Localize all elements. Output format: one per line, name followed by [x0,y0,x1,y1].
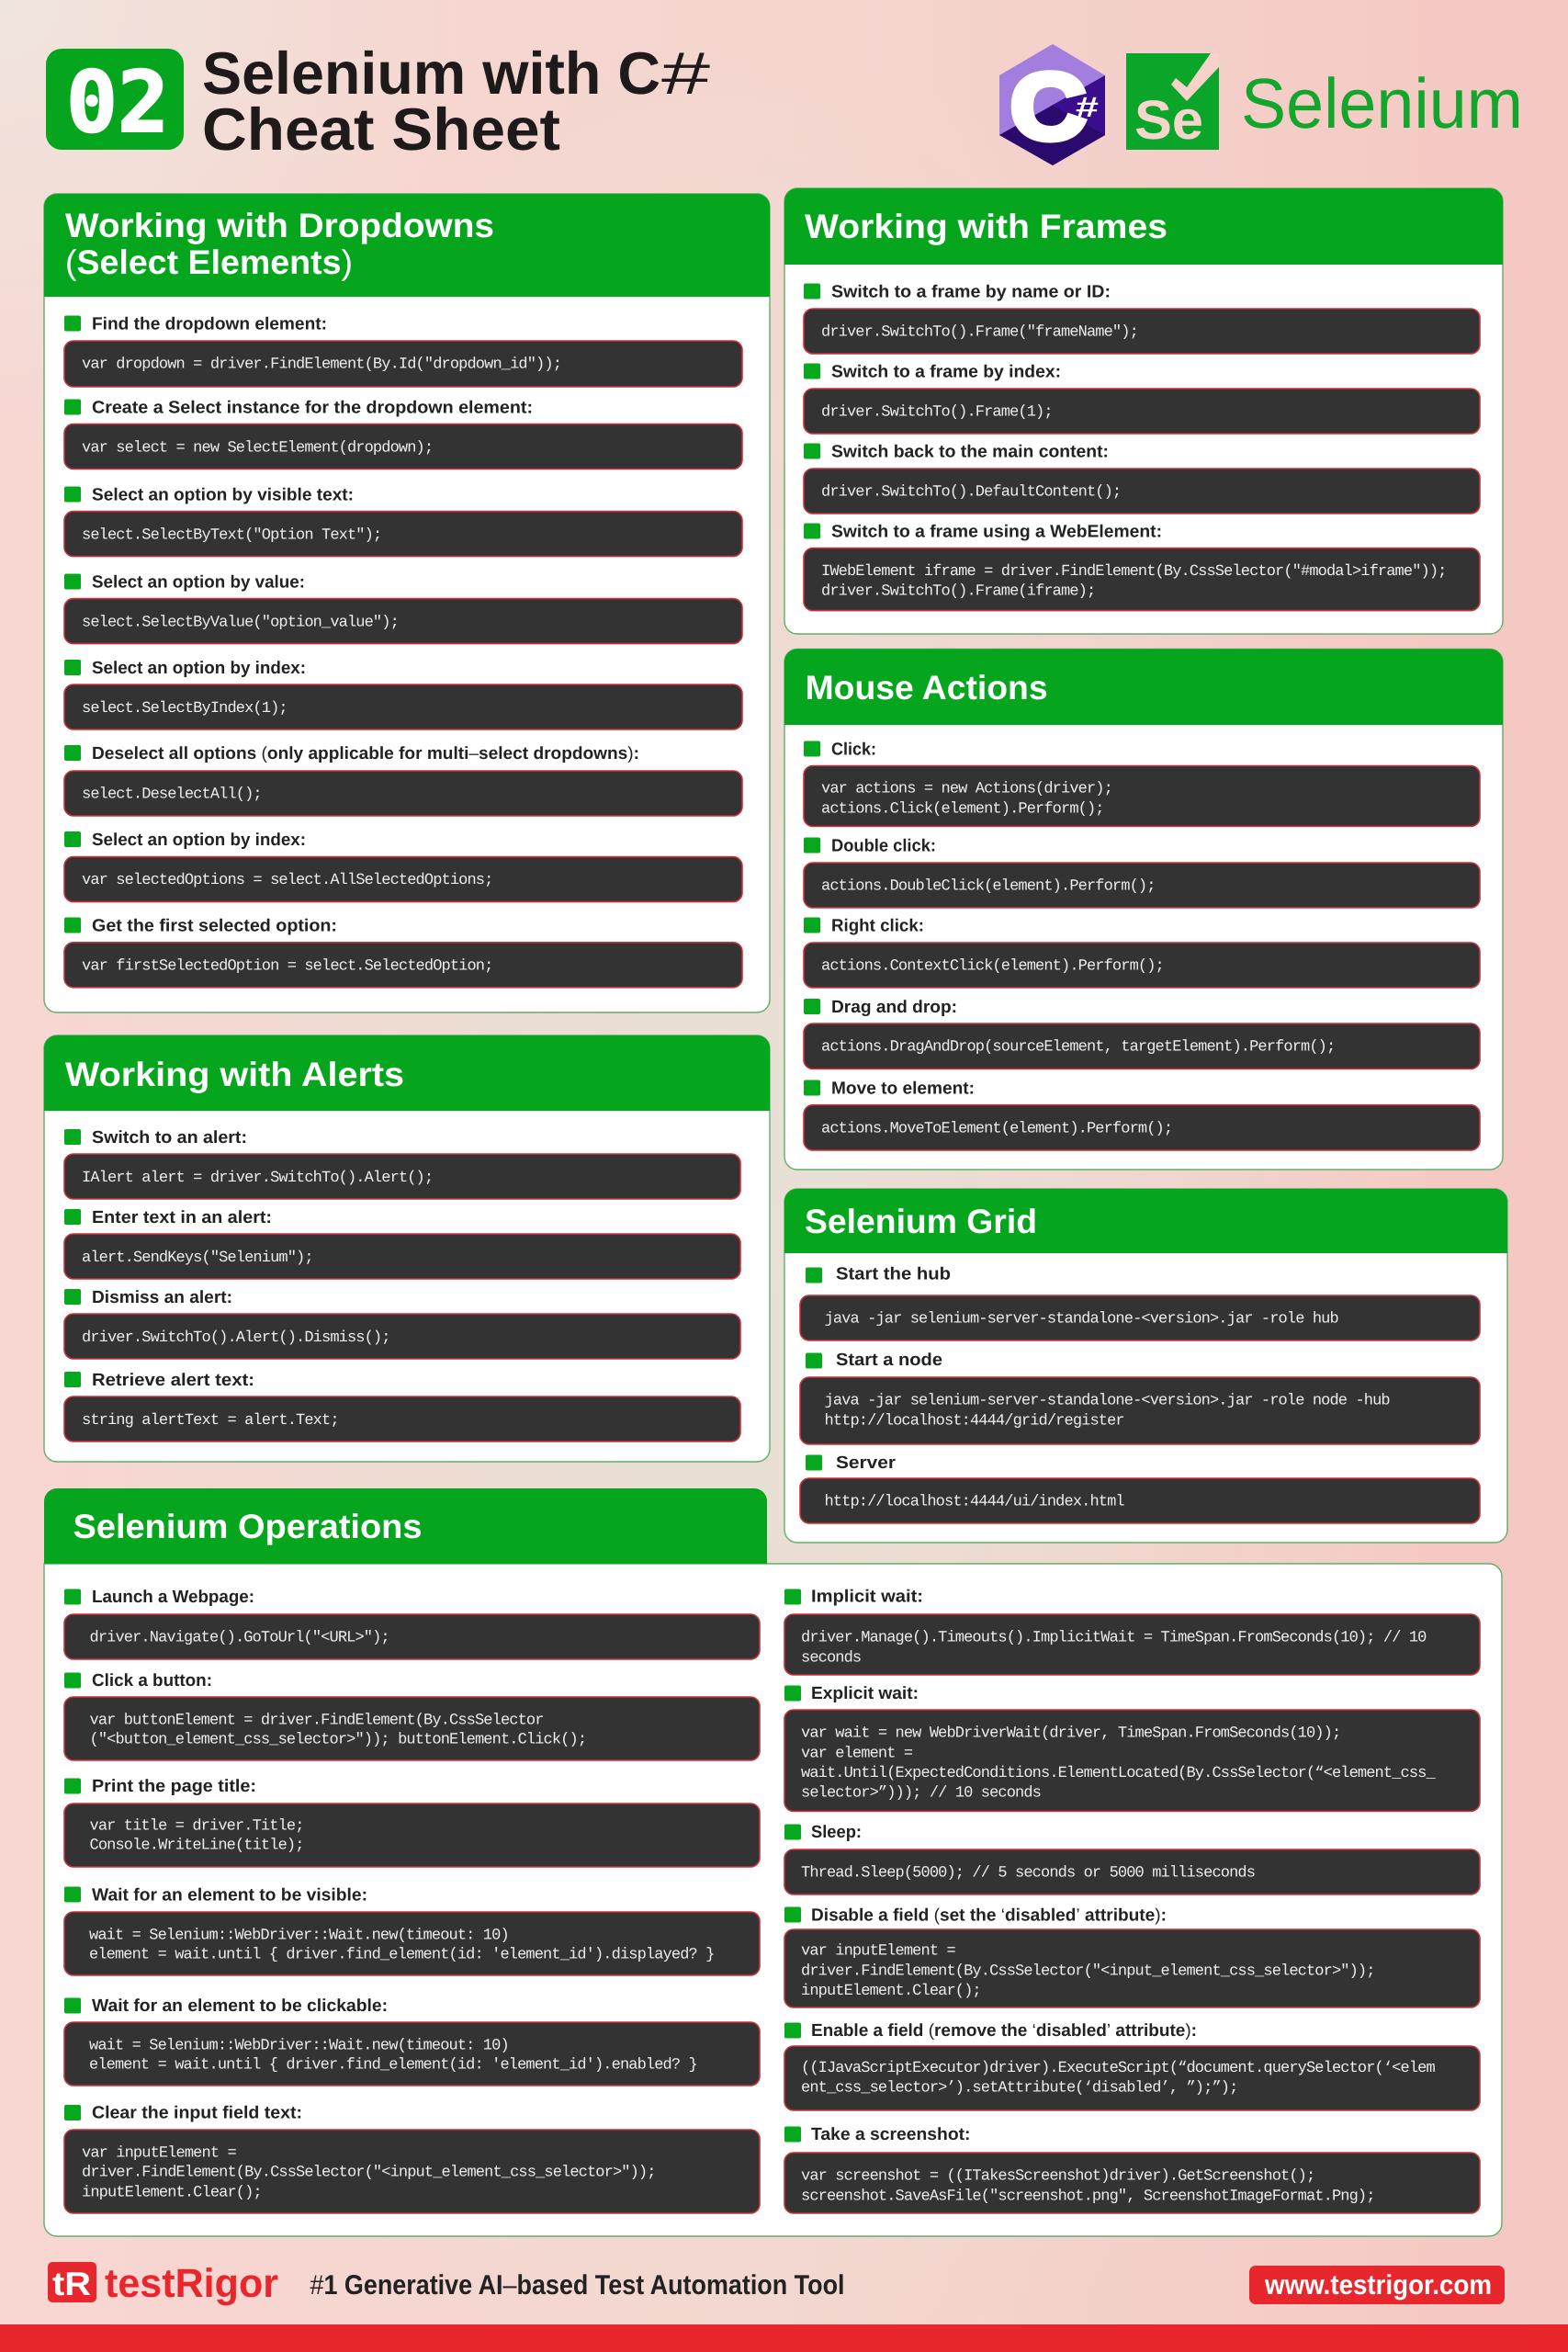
panel: Mouse Actions [784,649,1503,1170]
code: right click [804,943,1480,988]
code: disable field [784,1929,1480,2007]
code: default content [804,469,1480,514]
item label: click a button: Click a button: [92,1671,212,1690]
code: frame by name [804,309,1480,354]
code: frame by WebElement [804,548,1480,611]
item label: click [804,741,876,759]
code: explicit wait: var wait = new WebDriverWait(driver, TimeSpan.FromSeconds(10)); [801,1725,1340,1742]
code: launch webpage [64,1614,760,1659]
item label: default content: Switch back to the main content: [831,443,1109,461]
code: by value [64,599,742,644]
item label: visible text: Select an option by visible text: [92,485,354,505]
item label: frame by name: Switch to a frame by name or ID: [831,283,1111,301]
icon: Selenium logo [1126,53,1219,151]
code: clear input: driver.FindElement(By.CssSelector("<input_element_css_selector>")); [82,2165,656,2181]
logo: testRigor: testRigor [105,2261,278,2306]
code: wait clickable: element = wait.until { driver.find_element(id: 'element_id').enabled? } [89,2056,697,2075]
code: clear input: var inputElement = [82,2144,236,2163]
item label: screenshot: Take a screenshot: [811,2125,970,2144]
code: explicit wait [784,1710,1480,1812]
item label: explicit wait: Explicit wait: [811,1684,919,1703]
title: Cheat Sheet [202,96,560,163]
code: server [800,1478,1480,1523]
code: disable field: inputElement.Clear(); [801,1983,981,2000]
item label: right click: Right click: [831,917,924,935]
code: implicit wait [784,1614,1480,1675]
panel: Working with Alerts [44,1035,770,1462]
code: screenshot: screenshot.SaveAsFile("screenshot.png", ScreenshotImageFormat.Png); [801,2188,1375,2205]
code: switch to alert: IAlert alert = driver.SwitchTo().Alert(); [82,1170,433,1187]
panel: Working with Frames [784,188,1503,634]
item label: server: Server [836,1453,897,1473]
code: screenshot: var screenshot = ((ITakesScreenshot)driver).GetScreenshot(); [801,2168,1314,2185]
item label: dismiss: Dismiss an alert: [92,1288,232,1307]
code: enter text: alert.SendKeys("Selenium"); [82,1250,313,1267]
item label: sleep: Sleep: [811,1823,862,1842]
code: start the hub: java -jar selenium-server-standalone-<version>.jar -role hub [825,1310,1338,1329]
code: retrieve text: string alertText = alert.Text; [82,1412,339,1430]
title [202,40,710,163]
item label: drag and drop: Drag and drop: [831,998,957,1017]
icon: C# logo [999,44,1105,165]
code: find dropdown: var dropdown = driver.FindElement(By.Id("dropdown_id")); [82,356,561,373]
code: visible text: select.SelectByText("Option Text"); [82,527,381,544]
code: deselect all: select.DeselectAll(); [82,786,262,803]
code: disable field: driver.FindElement(By.CssSelector("<input_element_css_selector>")); [801,1962,1375,1981]
button: website: www.testrigor.com [1264,2270,1492,2301]
heading: Selenium Operations: Selenium Operations [73,1508,423,1545]
code: drag and drop: actions.DragAndDrop(sourceElement, targetElement).Perform(); [821,1038,1335,1057]
item label: implicit wait: Implicit wait: [811,1588,923,1606]
item label: frame by WebElement: Switch to a frame using a WebElement: [831,522,1162,542]
code: server: http://localhost:4444/ui/index.html [825,1494,1124,1510]
heading: Mouse Actions: Mouse Actions [806,669,1048,707]
code: by index: select.SelectByIndex(1); [82,700,288,718]
heading: Working with Dropdowns: (Select Elements) [65,243,353,281]
item label: by value: Select an option by value: [92,573,305,592]
code: click a button: var buttonElement = driver.FindElement(By.CssSelector [90,1713,544,1729]
code: sleep: Thread.Sleep(5000); // 5 seconds or 5000 milliseconds [801,1865,1255,1882]
item label: print title: Print the page title: [92,1777,256,1796]
code: by value: select.SelectByValue("option_value"); [82,614,399,632]
code: implicit wait: seconds [801,1650,861,1667]
code: explicit wait: var element = [801,1746,913,1762]
code: dismiss: driver.SwitchTo().Alert().Dismiss(); [82,1329,390,1347]
item label: sleep [784,1823,862,1842]
item label: enable field: Enable a field (remove the ‘disabled’ attribute): [811,2021,1197,2041]
code: create select: var select = new SelectElement(dropdown); [82,439,433,458]
code: enable field: ent_css_selector>’).setAttribute(‘disabled’, ”);”); [801,2080,1237,2097]
tagline: #1 Generative AI–based Test Automation Tool [310,2270,845,2301]
code: wait visible: element = wait.until { driver.find_element(id: 'element_id').displayed? } [89,1946,714,1964]
code: start the hub [800,1295,1480,1340]
code: click a button [64,1697,760,1760]
code: visible text [64,512,742,557]
item label: start a node: Start a node [836,1351,942,1370]
icon: Selenium logo: Se [1134,89,1203,151]
code: first selected: var firstSelectedOption = select.SelectedOption; [82,957,492,976]
item label: first selected: Get the first selected option: [92,917,337,935]
code: create select [64,424,742,469]
item label: selected options: Select an option by index: [92,831,306,850]
item label: disable field: Disable a field (set the ‘disabled’ attribute): [811,1905,1167,1926]
code: by index [64,684,742,729]
code: start a node: java -jar selenium-server-standalone-<version>.jar -role node -hub [825,1393,1390,1409]
heading: Working with Dropdowns [65,207,494,281]
item label: clear input: Clear the input field text: [92,2104,302,2122]
heading: Working with Alerts: Working with Alerts [65,1056,404,1093]
code: switch to alert [64,1154,740,1199]
code: launch webpage: driver.Navigate().GoToUrl("<URL>"); [90,1630,389,1646]
item label: move to element: Move to element: [831,1079,975,1099]
code: click: actions.Click(element).Perform(); [821,801,1104,818]
code: wait clickable: wait = Selenium::WebDriver::Wait.new(timeout: 10) [89,2038,509,2054]
item label: double click: Double click: [831,836,936,856]
code: find dropdown [64,341,742,387]
code: move to element: actions.MoveToElement(element).Perform(); [821,1121,1172,1137]
item label: frame by index: Switch to a frame by index: [831,362,1061,382]
code: click a button: ("<button_element_css_selector>")); buttonElement.Click(); [90,1731,586,1749]
code: frame by index [804,389,1480,434]
icon: C# logo: # [1076,91,1099,123]
item label: enter text: Enter text in an alert: [92,1208,272,1227]
code: explicit wait: selector>”))); // 10 seconds [801,1784,1041,1803]
code: print title: var title = driver.Title; [90,1817,304,1836]
code: wait visible: wait = Selenium::WebDriver::Wait.new(timeout: 10) [89,1928,509,1944]
panel: Selenium Operations [44,1488,1502,2236]
code: start a node: http://localhost:4444/grid/register [825,1413,1124,1430]
item label: deselect all: Deselect all options (only applicable for multi–select dropdowns): [92,744,639,763]
code: double click [804,863,1480,908]
code: right click: actions.ContextClick(element).Perform(); [821,957,1164,976]
code: explicit wait: wait.Until(ExpectedConditions.ElementLocated(By.CssSelector(“<element_css_ [801,1765,1436,1782]
item label: create select: Create a Select instance for the dropdown element: [92,399,533,417]
item label: click: Click: [831,741,876,759]
panel: Selenium Grid [784,1189,1507,1543]
item label: wait clickable: Wait for an element to be clickable: [92,1996,388,2016]
code: clear input [64,2130,760,2213]
icon: C# logo: C [1010,54,1086,159]
code: first selected [64,943,742,988]
heading: Working with Frames: Working with Frames [805,208,1168,245]
code: click: var actions = new Actions(driver); [821,781,1112,797]
code: selected options: var selectedOptions = select.AllSelectedOptions; [82,872,492,889]
title: Selenium with C [202,40,660,107]
code: frame by name: driver.SwitchTo().Frame("frameName"); [821,323,1138,342]
code: wait visible [64,1912,760,1975]
panel: Working with Dropdowns [44,194,770,1012]
code: print title: Console.WriteLine(title); [90,1838,304,1854]
code: move to element [804,1105,1480,1150]
badge: 02: 02 [66,53,169,152]
code: enable field [784,2046,1480,2110]
code: drag and drop [804,1023,1480,1069]
heading: Working with Dropdowns: Working with Dropdowns [65,207,494,244]
footer band [0,2324,1568,2352]
item label: find dropdown: Find the dropdown element: [92,314,327,334]
item label: by index: Select an option by index: [92,659,306,678]
heading: Selenium Grid: Selenium Grid [805,1203,1037,1240]
code: disable field: var inputElement = [801,1942,955,1961]
code: frame by WebElement: driver.SwitchTo().Frame(iframe); [821,582,1095,601]
item label: wait visible: Wait for an element to be visible: [92,1885,367,1905]
item label: switch to alert: Switch to an alert: [92,1128,247,1148]
code: implicit wait: driver.Manage().Timeouts().ImplicitWait = TimeSpan.FromSeconds(10); // 10 [801,1630,1427,1646]
item label: retrieve text: Retrieve alert text: [92,1371,254,1390]
code: enable field: ((IJavaScriptExecutor)driver).ExecuteScript(“document.querySelector(‘<elem [801,2060,1435,2077]
code: clear input: inputElement.Clear(); [82,2185,262,2201]
code: frame by WebElement: IWebElement iframe = driver.FindElement(By.CssSelector("#modal>iframe")); [821,563,1446,581]
code: start a node [800,1377,1480,1444]
code: deselect all [64,771,742,816]
item label: start the hub: Start the hub [836,1264,951,1284]
item label: server [806,1453,897,1473]
code: screenshot [784,2153,1480,2213]
code: sleep [784,1849,1480,1894]
logo wordmark: Selenium: Selenium [1241,64,1523,143]
code: enter text [64,1234,740,1279]
code: selected options [64,857,742,902]
item label: launch webpage: Launch a Webpage: [92,1588,254,1607]
title: # [661,40,710,107]
code: default content: driver.SwitchTo().DefaultContent(); [821,483,1121,502]
code: double click: actions.DoubleClick(element).Perform(); [821,878,1156,895]
code: retrieve text [64,1396,740,1442]
code: print title [64,1804,760,1867]
logo: testRigor: tR [52,2265,91,2302]
code: wait clickable [64,2022,760,2086]
code: dismiss [64,1314,740,1359]
code: click [804,766,1480,827]
code: frame by index: driver.SwitchTo().Frame(1); [821,404,1053,421]
